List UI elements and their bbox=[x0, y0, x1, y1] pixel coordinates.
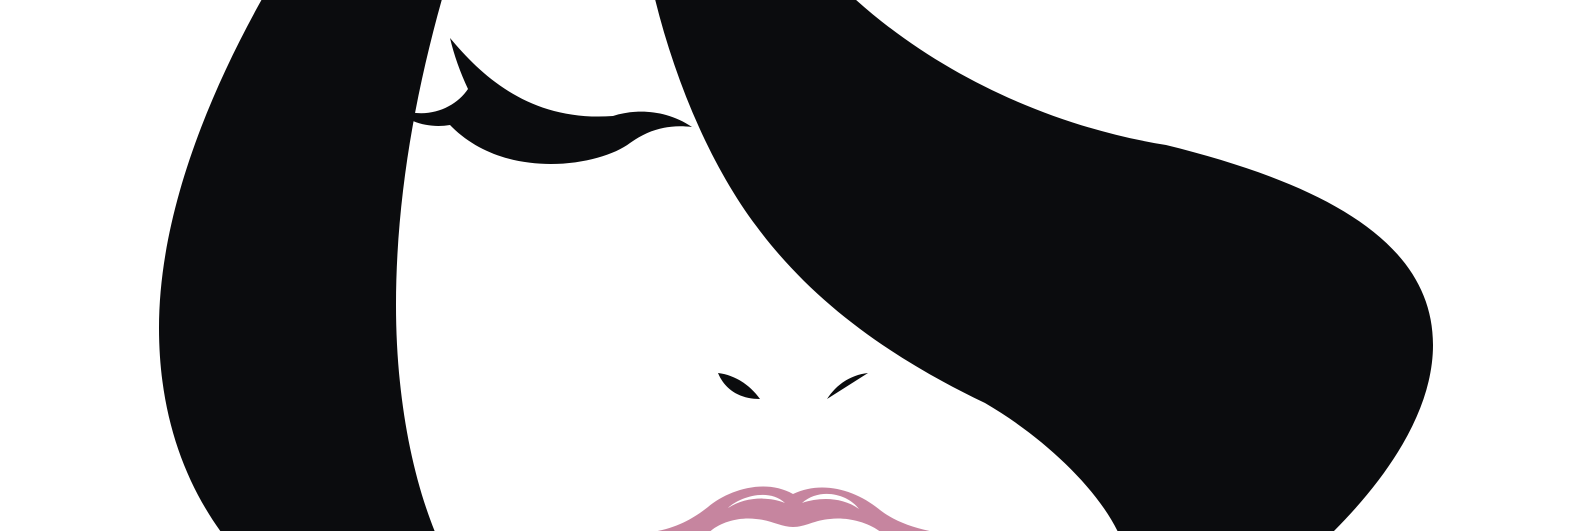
eyebrow and closed eye bbox=[405, 38, 692, 164]
hair: left lock bbox=[159, 0, 442, 531]
upper lip bbox=[655, 486, 932, 531]
right lip highlight bbox=[802, 494, 859, 509]
nose: left nostril bbox=[718, 373, 760, 399]
nose: right nostril bbox=[827, 373, 868, 399]
lips bbox=[655, 486, 932, 531]
hair: right sweep bbox=[655, 0, 1433, 531]
left lip highlight bbox=[728, 495, 785, 508]
